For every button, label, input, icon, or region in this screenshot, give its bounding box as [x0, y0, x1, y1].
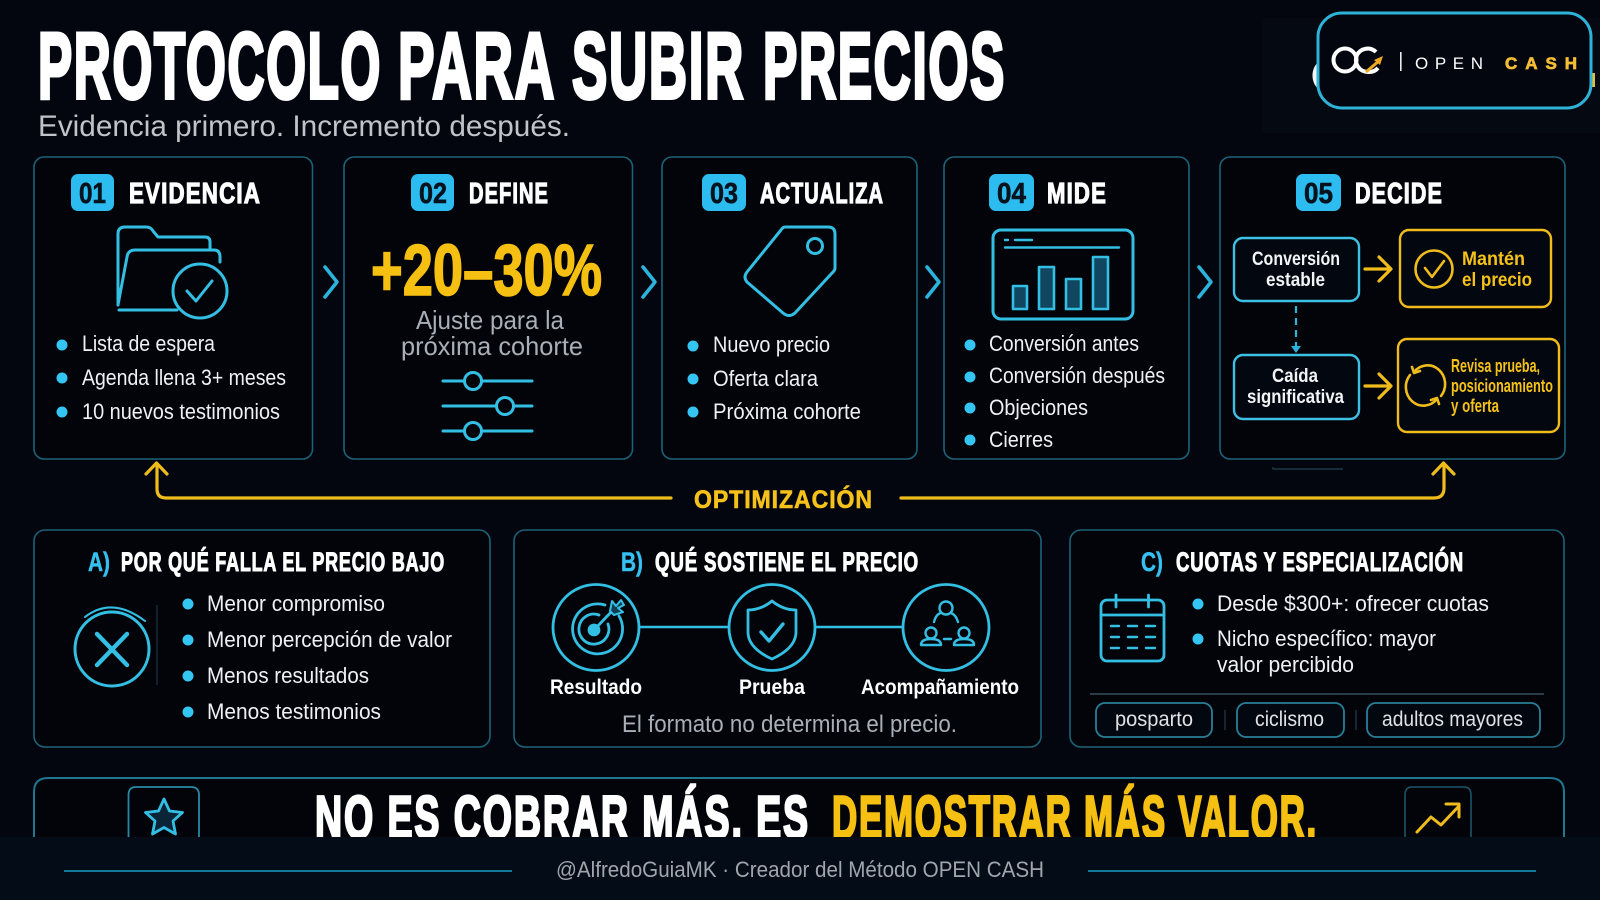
list: actualiza: Oferta clara	[713, 366, 819, 391]
list A: Menor compromiso	[207, 591, 385, 616]
heading C: CUOTAS Y ESPECIALIZACIÓN	[1176, 546, 1464, 577]
panel: 02 define	[344, 157, 632, 459]
subtitle: Evidencia primero. Incremento después.	[38, 110, 570, 143]
step badge 04	[989, 174, 1034, 211]
arrow: caída to revisa	[1365, 374, 1391, 398]
panel: 01 evidencia	[34, 157, 312, 459]
icon: trend up	[1405, 787, 1471, 840]
box: caída significativa: significativa	[1247, 387, 1344, 408]
big number: +20–30%	[371, 231, 602, 311]
heading: evidencia: EVIDENCIA	[129, 178, 261, 210]
panel: 05 decide	[1220, 157, 1565, 459]
footer credit: @AlfredoGuiaMK · Creador del Método OPEN CASH	[556, 857, 1044, 882]
heading C	[1141, 546, 1464, 577]
icon: sliders	[443, 372, 532, 440]
optimization loop arrows	[146, 463, 1454, 514]
heading B: QUÉ SOSTIENE EL PRECIO	[655, 546, 919, 577]
title: SUBIR	[572, 13, 745, 118]
list: mide: Cierres	[989, 427, 1053, 452]
list A: Menos resultados	[207, 663, 369, 688]
arrow: step 2 to 3	[643, 267, 655, 297]
list A: Menor percepción de valor	[207, 627, 452, 652]
icon: calendar	[1101, 595, 1164, 661]
icon: dashboard chart	[993, 230, 1133, 319]
tags: ciclismo	[1255, 708, 1324, 731]
heading A	[88, 546, 445, 577]
caption	[401, 305, 583, 361]
icon: shield with check	[729, 584, 815, 670]
arrow: step 3 to 4	[927, 267, 939, 297]
icon: people	[903, 584, 989, 670]
step badge 05: 05	[1304, 178, 1333, 210]
heading: define: DEFINE	[469, 178, 549, 210]
caption: próxima cohorte	[401, 331, 583, 361]
box: caída significativa	[1234, 355, 1359, 419]
dashed arrow down	[1291, 306, 1301, 353]
icon: folder with check	[118, 227, 227, 318]
list: actualiza: Nuevo precio	[713, 332, 830, 357]
panel: 04 mide	[944, 157, 1189, 459]
heading B	[621, 546, 919, 577]
icon: target	[553, 584, 639, 670]
title: PARA	[398, 13, 556, 118]
list: mide	[964, 331, 1165, 452]
labels: Prueba	[739, 676, 805, 699]
box: revisa prueba: posicionamiento	[1451, 376, 1553, 396]
arrow: step 4 to 5	[1199, 267, 1211, 297]
list C	[1192, 591, 1489, 677]
label: optimización: OPTIMIZACIÓN	[694, 484, 873, 514]
title: PRECIOS	[763, 13, 1006, 118]
box: mantén el precio	[1400, 230, 1551, 307]
list: evidencia: 10 nuevos testimonios	[82, 399, 280, 424]
tags: adultos mayores	[1382, 708, 1523, 731]
list C: Desde $300+: ofrecer cuotas	[1217, 591, 1489, 616]
list: mide: Objeciones	[989, 395, 1088, 420]
step badge 02: 02	[419, 178, 447, 210]
list: mide: Conversión después	[989, 363, 1165, 388]
note: El formato no determina el precio.	[622, 711, 957, 738]
heading: decide: DECIDE	[1355, 178, 1443, 210]
panel: A	[34, 530, 490, 747]
labels	[550, 676, 1019, 699]
panel: C	[1070, 530, 1564, 747]
heading: mide: MIDE	[1047, 178, 1107, 210]
step badge 03	[702, 174, 746, 211]
logo: CASH	[1505, 54, 1577, 73]
icon: star	[128, 787, 199, 840]
connecting lines	[640, 626, 902, 628]
step badge 04: 04	[997, 178, 1026, 210]
list: evidencia	[56, 331, 286, 424]
box: conversión estable	[1234, 238, 1359, 301]
list: actualiza: Próxima cohorte	[713, 399, 861, 424]
labels: Acompañamiento	[861, 676, 1019, 699]
title	[38, 13, 1006, 118]
panel: 03 actualiza	[662, 157, 917, 459]
box: mantén el precio: Mantén	[1462, 249, 1525, 270]
logo: OPEN	[1415, 54, 1483, 73]
list A	[182, 591, 452, 724]
step badge 02	[411, 174, 454, 211]
box: caída significativa: Caída	[1272, 366, 1318, 387]
step badge 01: 01	[79, 178, 106, 210]
caption: Ajuste para la	[416, 305, 565, 335]
box: mantén el precio: el precio	[1462, 270, 1532, 291]
box: revisa prueba	[1398, 339, 1559, 432]
tags	[1096, 703, 1540, 737]
box: revisa prueba: Revisa prueba,	[1451, 356, 1540, 376]
box: conversión estable: estable	[1266, 270, 1325, 291]
list: actualiza	[688, 332, 861, 424]
logo	[1262, 13, 1600, 133]
box: revisa prueba: y oferta	[1451, 396, 1500, 416]
icon: x mark in circle	[75, 607, 149, 686]
banner	[34, 778, 1564, 851]
arrow: step 1 to 2	[325, 267, 337, 297]
title: PROTOCOLO	[38, 13, 382, 118]
list C: valor percibido	[1217, 652, 1354, 677]
step badge 05	[1296, 174, 1341, 211]
step badge 03: 03	[710, 178, 738, 210]
heading C: C)	[1141, 547, 1163, 577]
box: conversión estable: Conversión	[1252, 249, 1340, 270]
heading A: A)	[88, 547, 110, 577]
heading: actualiza: ACTUALIZA	[760, 178, 884, 210]
heading A: POR QUÉ FALLA EL PRECIO BAJO	[121, 546, 445, 577]
step badge 01	[71, 174, 114, 211]
tags: posparto	[1115, 708, 1193, 731]
heading B: B)	[621, 547, 643, 577]
list C: Nicho específico: mayor	[1217, 626, 1436, 651]
list: mide: Conversión antes	[989, 331, 1139, 356]
list: evidencia: Agenda llena 3+ meses	[82, 365, 286, 390]
slogan: NO ES COBRAR MÁS. ES	[315, 784, 810, 851]
arrow: conversión to mantén	[1365, 257, 1391, 281]
list: evidencia: Lista de espera	[82, 331, 216, 356]
footer	[0, 837, 1600, 900]
list A: Menos testimonios	[207, 699, 381, 724]
panel: B	[514, 530, 1041, 747]
labels: Resultado	[550, 676, 642, 699]
icon: price tag	[745, 227, 835, 316]
